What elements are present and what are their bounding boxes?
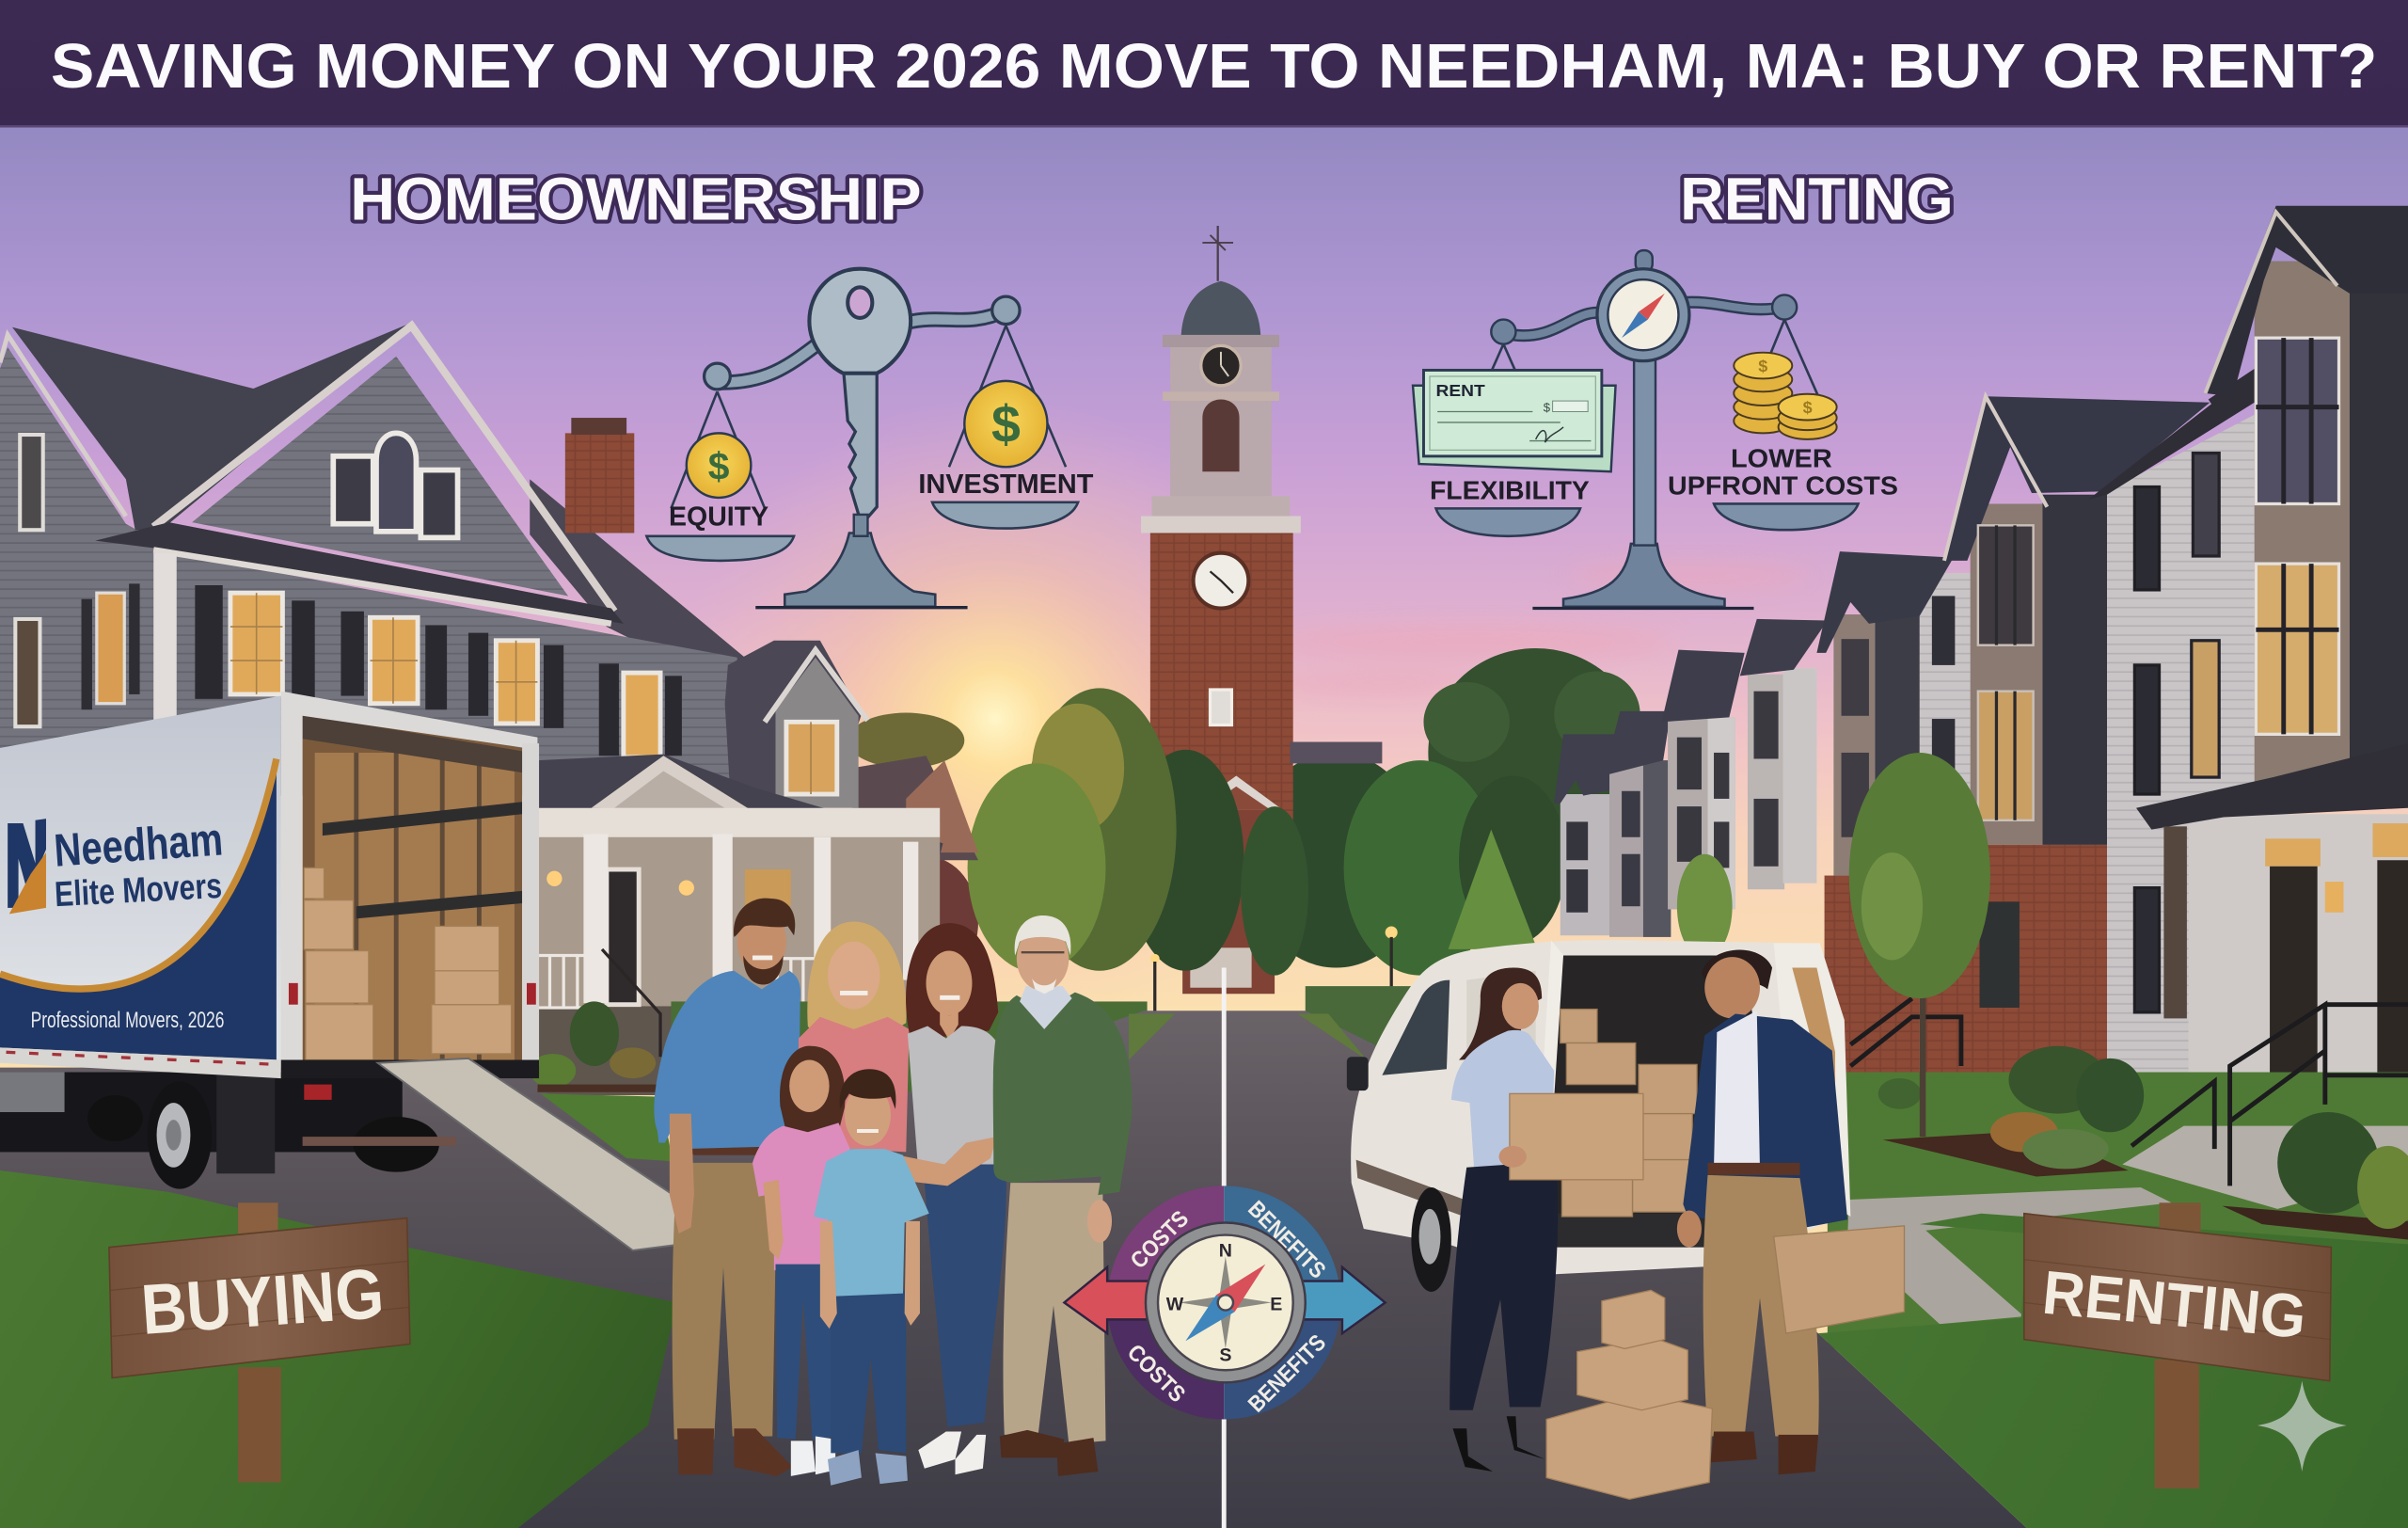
asphalt road <box>0 1011 2027 1528</box>
truck navy swoosh <box>0 758 277 1059</box>
badge benefits quadrants <box>1224 1186 1340 1302</box>
investment pan <box>932 502 1078 529</box>
badge labels <box>1122 1196 1331 1417</box>
flexibility pan <box>1436 508 1580 536</box>
badge costs quadrants <box>1107 1186 1224 1302</box>
sparkle watermark <box>2258 1381 2347 1472</box>
shrubs left house <box>530 1001 660 1092</box>
left house <box>0 323 943 1095</box>
compass dial: W <box>1166 1295 1184 1315</box>
badge labels: BENEFITS <box>1243 1196 1330 1283</box>
truck door frame <box>281 692 537 1073</box>
path <box>1847 1187 2172 1324</box>
shrubs right <box>1878 1046 2408 1229</box>
house gable window <box>333 433 458 537</box>
upper left lawn <box>541 1093 673 1161</box>
townhouse B <box>1971 503 2042 845</box>
arrow: costs left <box>1064 1267 1153 1333</box>
foreground centre trees <box>880 688 1537 1023</box>
clock tower <box>1141 226 1382 994</box>
truck ramp <box>378 1058 682 1250</box>
truck rear wheel <box>354 1117 439 1172</box>
girl <box>752 1046 850 1476</box>
van body <box>1351 940 1847 1275</box>
compass dial: N <box>1219 1240 1232 1261</box>
coin symbols: $ <box>1758 357 1767 375</box>
key head <box>809 269 911 374</box>
renting scale <box>1413 250 1898 608</box>
coin stack tall <box>1734 353 1792 433</box>
renting sign <box>2024 1202 2331 1488</box>
house main wall <box>153 549 737 796</box>
title: SAVING MONEY ON YOUR 2026 MOVE TO NEEDHAM, MA: BUY OR RENT? <box>51 31 2377 102</box>
road and ground <box>0 986 2408 1528</box>
moving truck <box>0 692 682 1250</box>
rent cheque: $ <box>1544 401 1551 415</box>
heading: homeownership: HOMEOWNERSHIP <box>350 166 922 232</box>
truck boxes <box>304 867 512 1059</box>
house porch lamps <box>547 871 562 886</box>
neighbour house <box>852 756 978 860</box>
pink clouds <box>1275 565 1813 692</box>
badge labels: BENEFITS <box>1244 1330 1331 1417</box>
heading: renting: RENTING <box>1680 166 1954 232</box>
townhouse F <box>1609 760 1671 937</box>
investment coin <box>964 381 1047 467</box>
background trees <box>848 648 1643 976</box>
rent cheque: RENT <box>1436 381 1485 400</box>
tower louvre window <box>1202 399 1240 471</box>
van wheel <box>1411 1187 1451 1292</box>
railings <box>1850 998 2408 1186</box>
delivery van <box>1347 940 1850 1292</box>
right hanger <box>949 326 1066 467</box>
equity coin: $ <box>708 444 730 487</box>
family group <box>654 899 1132 1486</box>
left hanger <box>671 391 765 508</box>
lower upfront costs label: LOWER <box>1731 443 1832 472</box>
church entrance <box>1182 802 1275 994</box>
right lawn <box>1818 1214 2408 1528</box>
renting label: RENTING <box>2039 1258 2309 1351</box>
tower upper clock <box>1201 345 1241 386</box>
older man <box>993 915 1132 1476</box>
house porch roof <box>537 755 943 855</box>
truck side panel <box>0 696 281 1059</box>
van open cargo <box>1548 955 1780 1219</box>
rent cheque <box>1413 370 1616 471</box>
compass stand <box>1563 544 1724 607</box>
brunette woman <box>895 923 1012 1474</box>
compass dial: E <box>1270 1295 1282 1315</box>
house right roof <box>530 479 745 696</box>
man in blue shirt <box>654 899 800 1476</box>
lawn behind family <box>671 1001 1148 1117</box>
woman renter <box>1450 968 1643 1472</box>
house railing <box>537 955 817 1008</box>
equity coin <box>687 433 751 498</box>
compass dial: S <box>1219 1345 1231 1365</box>
buying sign <box>109 1202 410 1482</box>
compass scale arms <box>1513 302 1784 336</box>
tower main clock <box>1194 553 1248 608</box>
coin stack short <box>1779 394 1837 439</box>
man renter <box>1677 949 1904 1474</box>
boy <box>814 1069 929 1486</box>
investment label: INVESTMENT <box>918 470 1094 500</box>
mulch right <box>1883 1131 2129 1177</box>
flexibility label: FLEXIBILITY <box>1430 476 1590 505</box>
lawn behind van <box>1306 986 1559 1109</box>
badge labels: COSTS <box>1122 1340 1190 1408</box>
compass scale head <box>1636 250 1653 272</box>
truck chassis <box>0 1073 403 1152</box>
sunset glow <box>583 384 1413 1059</box>
homeownership scale <box>646 269 1094 608</box>
man renter carton <box>1774 1226 1904 1333</box>
compass badge <box>1064 1186 1386 1419</box>
truck name: Elite Movers <box>54 866 223 914</box>
badge labels: COSTS <box>1126 1206 1194 1274</box>
coin symbols: $ <box>1803 398 1813 417</box>
house dormer <box>725 641 862 806</box>
truck name <box>53 814 225 914</box>
townhouse E <box>1668 717 1735 909</box>
townhouse G far <box>1560 794 1614 935</box>
front tree right <box>1677 753 1990 1137</box>
arrow: benefits right <box>1296 1267 1386 1333</box>
townhouse steps <box>2122 1126 2408 1209</box>
investment coin: $ <box>991 395 1021 454</box>
box stack <box>1546 1290 1712 1499</box>
renting couple <box>1450 949 1904 1499</box>
townhouse A tan <box>2255 262 2350 784</box>
left lawn <box>0 1170 677 1528</box>
truck tagline: Professional Movers, 2026 <box>31 1009 224 1033</box>
compass dial <box>1146 1223 1306 1382</box>
key scale arms <box>717 310 1006 383</box>
house main roof <box>12 323 412 530</box>
blonde woman <box>799 922 910 1152</box>
truck name: Needham <box>53 814 225 877</box>
truck wheel <box>148 1081 212 1189</box>
house chimney <box>565 433 634 533</box>
tower dome <box>1181 281 1260 341</box>
key stand <box>784 533 935 607</box>
townhouse D <box>1748 675 1784 889</box>
far lawns <box>1129 1013 1367 1059</box>
van boxes <box>1560 1010 1697 1217</box>
townhouse C <box>1833 614 1875 876</box>
right townhouses <box>1554 206 2408 1090</box>
buying label: BUYING <box>138 1253 387 1349</box>
townhouse A white siding <box>2107 415 2255 1075</box>
coin symbols <box>1758 357 1813 417</box>
lawn base by townhouses <box>1828 1073 2408 1348</box>
house gable face <box>192 357 568 596</box>
left hanger <box>1491 344 1515 372</box>
divider line <box>1222 968 1227 1528</box>
truck cargo interior <box>303 709 522 1059</box>
costs pan <box>1714 503 1859 530</box>
house windows upper storey <box>195 585 682 757</box>
house porch wall <box>537 821 940 1006</box>
tower brick shaft <box>1150 530 1293 821</box>
right hanger <box>1770 320 1818 396</box>
equity label: EQUITY <box>669 501 768 532</box>
townhouse A porch <box>2189 814 2408 1090</box>
key shaft <box>843 366 877 519</box>
lower upfront costs label <box>1668 443 1898 501</box>
townhouse A windows <box>2134 338 2339 1012</box>
truck logo <box>8 819 46 914</box>
tower lantern <box>1170 338 1272 500</box>
title banner <box>0 0 2408 128</box>
equity pan <box>646 536 794 561</box>
lower upfront costs label: UPFRONT COSTS <box>1668 471 1898 501</box>
house left wing wall <box>0 347 153 768</box>
